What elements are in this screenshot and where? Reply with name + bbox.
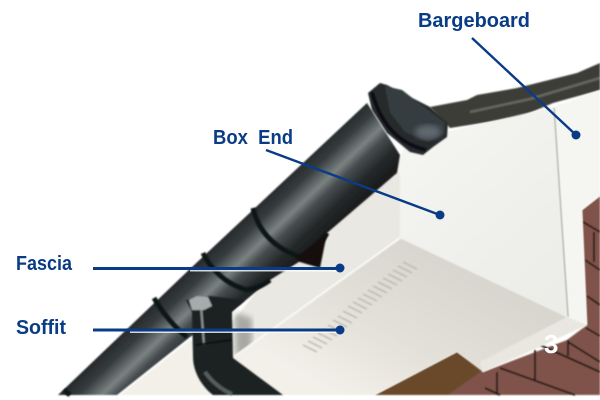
fascia panel [225, 172, 400, 358]
callout: Soffit [16, 317, 344, 339]
label: Fascia: Fascia [16, 253, 73, 275]
label: Soffit: Soffit [16, 317, 66, 339]
label: Box End: Box End [213, 127, 293, 149]
gutter bracket shadow [296, 233, 327, 268]
verge roof strip [430, 63, 600, 128]
leader line: Soffit [93, 328, 340, 332]
marker: Soffit [336, 326, 344, 334]
box end panel [395, 107, 568, 317]
callout: Bargeboard [418, 10, 580, 140]
marker: Bargeboard [572, 130, 580, 140]
soffit vents [303, 262, 417, 352]
callout: Box End [213, 127, 444, 220]
marker: Fascia [336, 264, 344, 272]
gutter stop end [368, 83, 448, 155]
leader line: Bargeboard [472, 38, 576, 135]
marker: Box End [436, 210, 444, 220]
leader line: Fascia [93, 267, 340, 270]
leader line: Box End [266, 150, 440, 215]
gutter brackets [64, 208, 327, 395]
downpipe [186, 296, 283, 395]
bargeboard [553, 90, 600, 325]
page number: 3 [544, 329, 558, 359]
highlight: Soffit line [130, 332, 340, 333]
soffit panel [120, 238, 587, 395]
brick wall [375, 196, 600, 395]
callout: Fascia [16, 253, 344, 275]
gutter [58, 103, 400, 395]
label: Bargeboard: Bargeboard [418, 10, 530, 32]
highlight: Fascia line [190, 270, 340, 272]
